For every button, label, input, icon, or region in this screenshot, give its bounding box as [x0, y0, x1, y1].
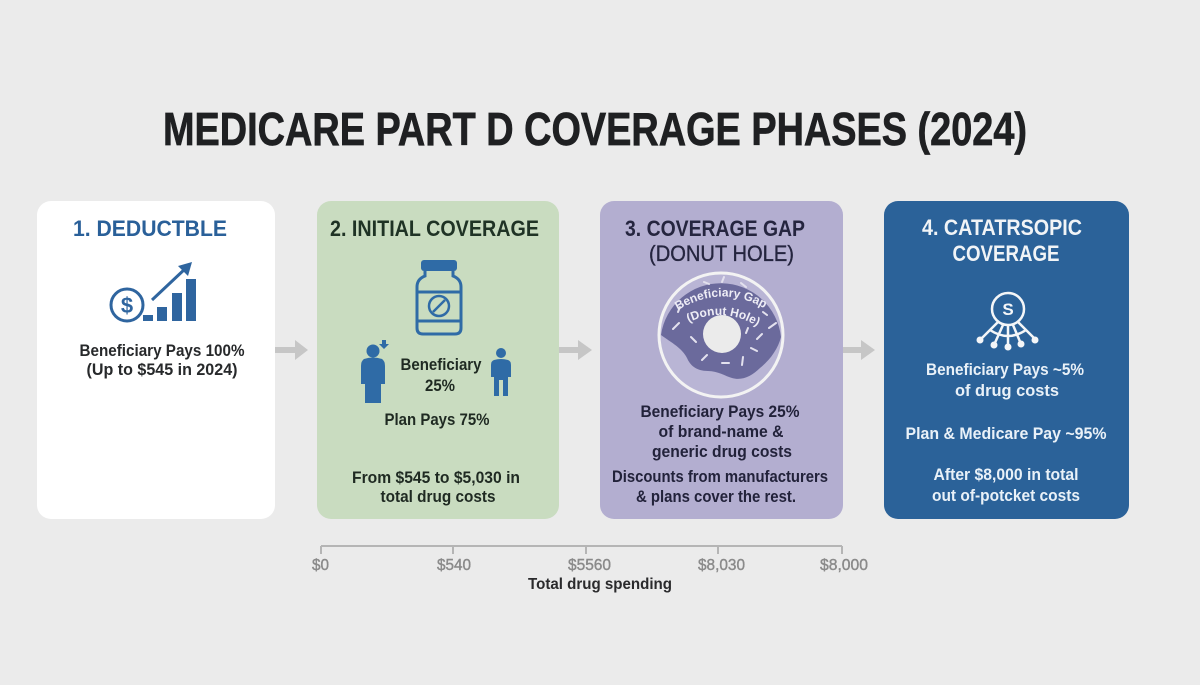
panel: deductible: [37, 201, 275, 519]
chart: spending axis: [312, 546, 868, 593]
icon: donut: [658, 272, 784, 398]
heading: coverage gap: (DONUT HOLE): [649, 241, 794, 266]
text: donut label: Beneficiary Gap: [674, 288, 766, 310]
text: axis title: Total drug spending: [528, 576, 672, 593]
arrow: initial coverage to gap: [559, 340, 592, 360]
heading: catastrophic coverage: [922, 215, 1082, 266]
icon: dollar with network nodes: S: [1002, 300, 1014, 319]
text: catastrophic details: out of-potcket costs: [932, 487, 1080, 505]
panel: initial coverage: [317, 201, 559, 519]
text: beneficiary and plan shares: Beneficiary: [400, 356, 482, 374]
text: gap beneficiary share: generic drug costs: [652, 443, 792, 461]
text: initial coverage range: From $545 to $5,030 in: [352, 469, 520, 487]
text: catastrophic details: Beneficiary Pays ~5%: [926, 361, 1084, 379]
text: deductible details: Beneficiary Pays 100%: [80, 342, 245, 360]
text: initial coverage range: [352, 469, 520, 506]
text: initial coverage range: total drug costs: [380, 488, 496, 506]
heading: initial coverage: 2. INITIAL COVERAGE: [330, 216, 539, 241]
panel: coverage gap: [600, 201, 843, 519]
text: deductible details: (Up to $545 in 2024): [86, 361, 238, 379]
text: beneficiary and plan shares: 25%: [425, 377, 455, 395]
text: catastrophic details: [906, 361, 1107, 505]
icon: pill bottle: [417, 260, 461, 334]
text: catastrophic details: of drug costs: [955, 382, 1059, 400]
text: gap beneficiary share: Beneficiary Pays 25%: [640, 403, 800, 421]
text: catastrophic details: After $8,000 in total: [934, 466, 1078, 484]
text: gap discounts: Discounts from manufacturers: [612, 468, 828, 486]
text: gap beneficiary share: [640, 403, 800, 461]
text: axis tick labels: $0: [312, 557, 329, 574]
heading: deductible: 1. DEDUCTBLE: [73, 216, 227, 241]
icon: plan person: [491, 348, 511, 396]
text: gap discounts: & plans cover the rest.: [636, 488, 796, 506]
text: beneficiary and plan shares: Plan Pays 75%: [384, 411, 490, 429]
icon: dollar and rising bars: [111, 262, 196, 321]
text: deductible details: [80, 342, 245, 379]
text: axis tick labels: $8,000: [820, 557, 868, 574]
text: gap discounts: [612, 468, 828, 506]
title: MEDICARE PART D COVERAGE PHASES (2024): [163, 103, 1027, 155]
heading: catastrophic coverage: COVERAGE: [952, 241, 1060, 266]
panel: catastrophic coverage: [884, 201, 1129, 519]
arrow: gap to catastrophic: [843, 340, 875, 360]
text: gap beneficiary share: of brand-name &: [658, 423, 784, 441]
heading: coverage gap: 3. COVERAGE GAP: [625, 216, 805, 241]
text: donut label: [674, 288, 766, 328]
text: axis tick labels: $5560: [568, 557, 611, 574]
text: axis tick labels: [312, 557, 868, 574]
text: axis tick labels: $8,030: [698, 557, 745, 574]
arrow: deductible to initial coverage: [275, 340, 308, 360]
heading: coverage gap: [625, 216, 805, 266]
icon: beneficiary person: [361, 340, 389, 403]
icon: dollar with network nodes: [976, 293, 1038, 350]
text: catastrophic details: Plan & Medicare Pay ~95%: [906, 425, 1107, 443]
icon: dollar and rising bars: $: [121, 293, 133, 318]
heading: catastrophic coverage: 4. CATATRSOPIC: [922, 215, 1082, 240]
text: donut label: (Donut Hole): [687, 307, 760, 328]
text: beneficiary and plan shares: [384, 356, 490, 429]
text: axis tick labels: $540: [437, 557, 471, 574]
